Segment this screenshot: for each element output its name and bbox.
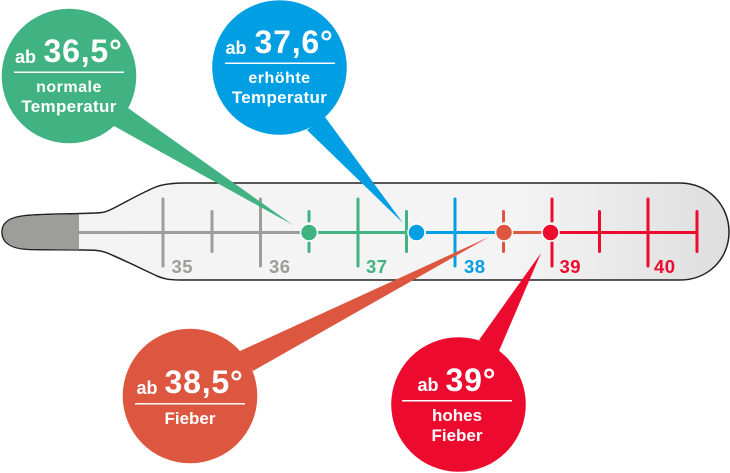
- callout: 38,5 Fieber: Fieber: [164, 409, 216, 428]
- scale: orange section: [504, 212, 542, 252]
- callout: 38,5 Fieber: ab: [136, 378, 158, 398]
- callout: 36,5 normale Temperatur: ab: [15, 47, 36, 67]
- callout: 36,5 normale Temperatur: [2, 9, 293, 225]
- scale: red section: [552, 199, 697, 266]
- scale: blue section: [426, 199, 496, 266]
- callout: 36,5 normale Temperatur: 36,5°: [44, 33, 123, 69]
- marker: 37,6: [408, 224, 425, 241]
- callout: 36,5 normale Temperatur: Temperatur: [21, 97, 117, 116]
- callout: 38,5 Fieber: [123, 237, 489, 463]
- scale: green section: [309, 199, 407, 266]
- callout: 37,6 erhöhte Temperatur: ab: [226, 38, 247, 58]
- marker: 38,5: [496, 224, 512, 241]
- callout: 37,6 erhöhte Temperatur: Temperatur: [232, 88, 327, 107]
- scale numbers: [172, 256, 675, 277]
- scale numbers: 40: [654, 256, 675, 277]
- callout: 38,5 Fieber: 38,5°: [164, 364, 244, 400]
- scale: grey section: [79, 199, 302, 266]
- callout: 39 hohes Fieber: Fieber: [431, 426, 483, 445]
- callout: 37,6 erhöhte Temperatur: erhöhte: [248, 70, 311, 87]
- scale numbers: 35: [172, 256, 193, 277]
- callout: 39 hohes Fieber: 39°: [446, 362, 496, 398]
- marker: 39: [542, 224, 559, 241]
- callout: 39 hohes Fieber: [391, 253, 541, 472]
- scale numbers: 36: [269, 256, 290, 277]
- marker: 36,5: [300, 224, 318, 241]
- callout: 39 hohes Fieber: hohes: [432, 406, 482, 425]
- callout: 36,5 normale Temperatur: normale: [36, 79, 102, 96]
- callout: 37,6 erhöhte Temperatur: 37,6°: [254, 24, 334, 60]
- thermometer body: [2, 183, 729, 280]
- scale numbers: 38: [464, 256, 485, 277]
- callout: 39 hohes Fieber: ab: [418, 375, 439, 395]
- scale numbers: 39: [560, 256, 581, 277]
- scale numbers: 37: [366, 256, 387, 277]
- callout: 37,6 erhöhte Temperatur: [212, 0, 403, 223]
- mercury bulb: [3, 214, 79, 250]
